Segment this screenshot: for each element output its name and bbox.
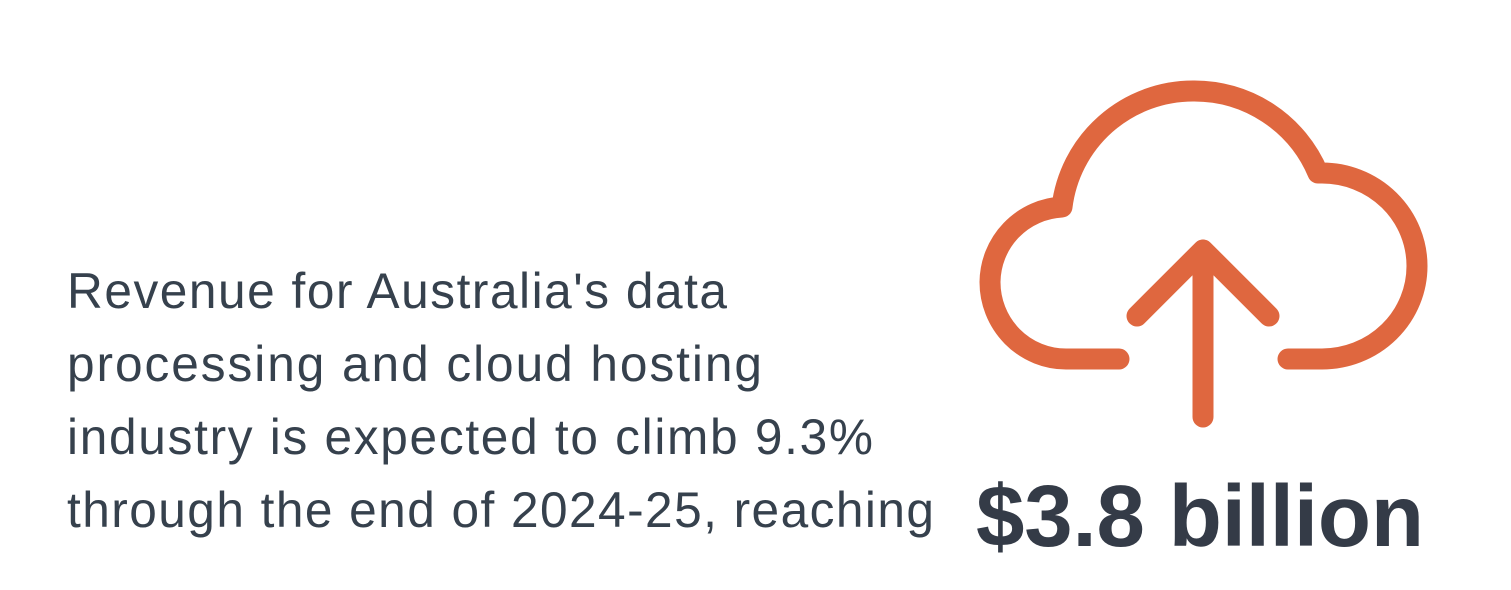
icon: upload arrow (1137, 250, 1269, 417)
text block: revenue description: Revenue for Australia's data (67, 263, 727, 319)
text block: revenue description: industry is expected to climb 9.3% (67, 409, 873, 465)
icon: cloud outline (990, 91, 1417, 359)
text block: revenue description: processing and cloud hosting (67, 336, 762, 392)
text block: revenue description: through the end of 2024-25, reaching (67, 482, 934, 538)
icon: cloud with upload arrow (990, 91, 1417, 417)
headline figure: $3.8 billion: $3.8 billion (976, 468, 1424, 565)
text block: revenue description (67, 263, 934, 538)
